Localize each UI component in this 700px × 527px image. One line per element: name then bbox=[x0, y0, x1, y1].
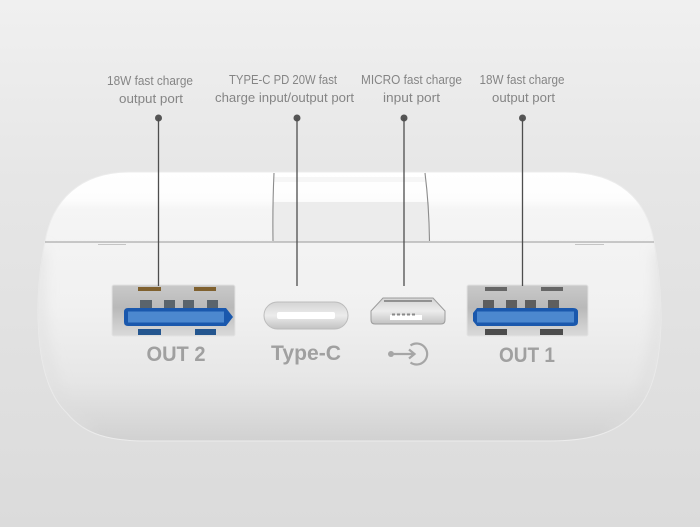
text: 18W output port right: 18W fast charge bbox=[480, 72, 564, 87]
callout: Micro bbox=[361, 72, 462, 286]
label: OUT 2: OUT 2 bbox=[146, 343, 206, 366]
power bank body bbox=[38, 172, 661, 441]
text: 18W output port right: output port bbox=[492, 90, 555, 105]
body seam bbox=[45, 241, 654, 243]
port: OUT 2 USB-A bbox=[112, 285, 235, 336]
port: Type-C bbox=[264, 302, 348, 329]
callout: OUT 1 bbox=[480, 72, 564, 286]
port: Micro USB bbox=[371, 298, 445, 324]
top centre recess bbox=[273, 173, 430, 242]
text: 18W output port left: output port bbox=[119, 91, 183, 106]
text: 18W output port left: 18W fast charge bbox=[107, 73, 193, 88]
label: Type-C: Type-C bbox=[271, 342, 341, 365]
text: Type-C PD: charge input/output port bbox=[215, 90, 354, 105]
text: Type-C PD: TYPE-C PD 20W fast bbox=[229, 72, 337, 87]
callout: Type-C bbox=[215, 72, 354, 286]
callout: OUT 2 bbox=[107, 73, 193, 286]
text: Micro: input port bbox=[383, 90, 440, 105]
text: Micro: MICRO fast charge bbox=[361, 72, 462, 87]
port: OUT 1 USB-A bbox=[467, 285, 588, 336]
icon: micro input bbox=[388, 344, 427, 364]
label: OUT 1: OUT 1 bbox=[499, 344, 555, 367]
